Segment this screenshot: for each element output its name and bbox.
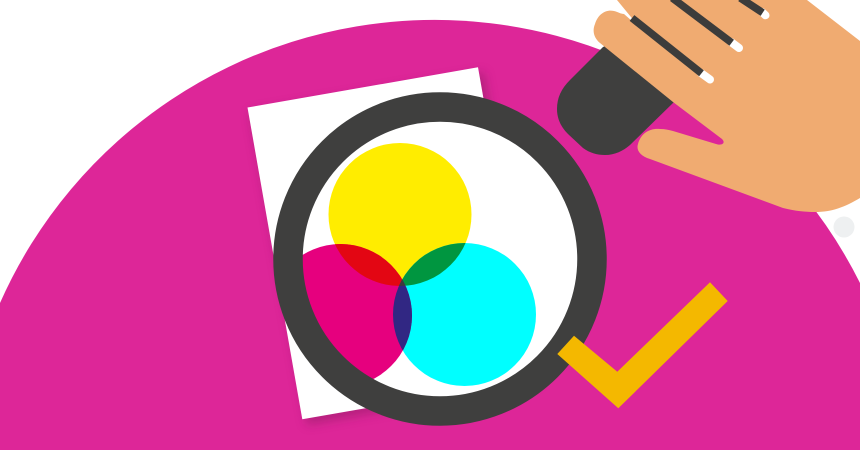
finger gap lines [701,73,710,80]
cyan circle [393,243,536,386]
dark centre overlap [399,279,406,286]
lens white interior [300,119,580,399]
magenta circle [302,244,412,379]
magnifier handle [557,30,674,155]
paper sheet [248,67,533,419]
colour circles: CMY overlap [302,143,536,386]
yellow circle [328,143,472,286]
magnifier ring [288,107,592,411]
green overlap [399,243,466,286]
hand shape [594,0,860,212]
decorative grey dot [834,216,854,238]
blue overlap [393,280,412,350]
yellow check mark [557,282,728,408]
red overlap [335,244,402,286]
paper shadow [250,72,539,425]
hand [594,0,860,212]
